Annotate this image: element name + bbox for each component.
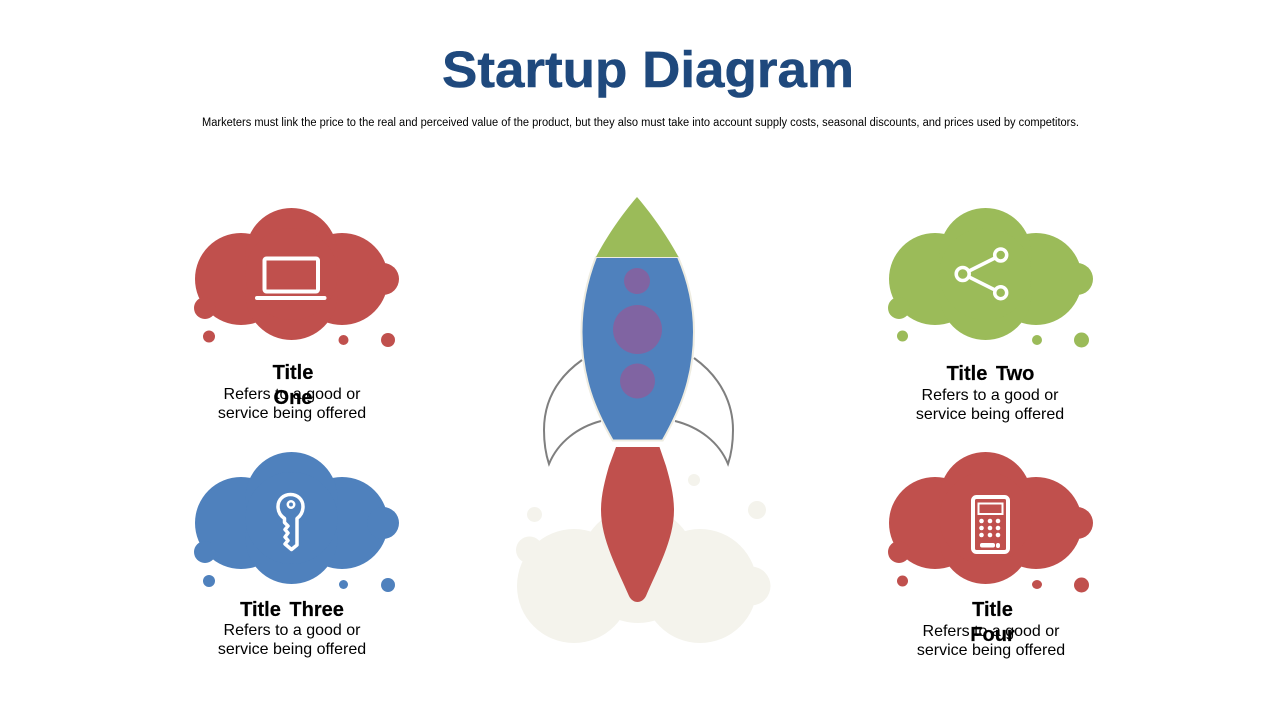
thought dots: red	[203, 330, 395, 347]
title: Startup Diagram	[442, 41, 854, 98]
icon: laptop	[257, 258, 324, 298]
heading: title one: One	[274, 387, 312, 409]
rocket smoke	[516, 474, 770, 643]
heading: title three: Title Three	[240, 599, 344, 621]
text: description two: Refers to a good or	[922, 387, 1059, 404]
heading: title one: Title	[273, 362, 313, 384]
heading: title two: Title Two	[947, 363, 1034, 385]
rocket fins	[544, 358, 733, 464]
heading: title four: Four	[970, 624, 1015, 646]
panel: title one	[194, 208, 399, 422]
panel: title three	[194, 452, 399, 658]
text: description four: Refers to a good or	[923, 623, 1060, 640]
icon: key	[278, 494, 303, 550]
text: description two: service being offered	[916, 406, 1064, 423]
text: description three: service being offered	[218, 641, 366, 658]
text: description one: service being offered	[218, 405, 366, 422]
thought dots: red	[897, 576, 1089, 592]
panel: title two	[888, 208, 1093, 423]
rocket nose	[596, 197, 678, 257]
cloud: green	[888, 208, 1093, 340]
icon: share	[956, 249, 1007, 299]
cloud: red	[888, 452, 1093, 584]
thought dots: blue	[203, 575, 395, 592]
text: description one: Refers to a good or	[224, 386, 361, 403]
subtitle: Marketers must link the price to the real and perceived value of the product, but they also must take into account supply costs, seasonal discounts, and prices used by competitors.	[202, 117, 1079, 129]
icon: calculator	[973, 497, 1008, 552]
text: description four: service being offered	[917, 642, 1065, 659]
rocket flame	[601, 447, 674, 602]
cloud: blue	[194, 452, 399, 584]
cloud: red	[194, 208, 399, 340]
heading: title four: Title	[972, 599, 1013, 621]
panel: title four	[888, 452, 1093, 659]
text: description three: Refers to a good or	[224, 622, 361, 639]
thought dots: green	[897, 330, 1089, 348]
rocket windows	[613, 268, 662, 398]
rocket body	[582, 257, 694, 440]
